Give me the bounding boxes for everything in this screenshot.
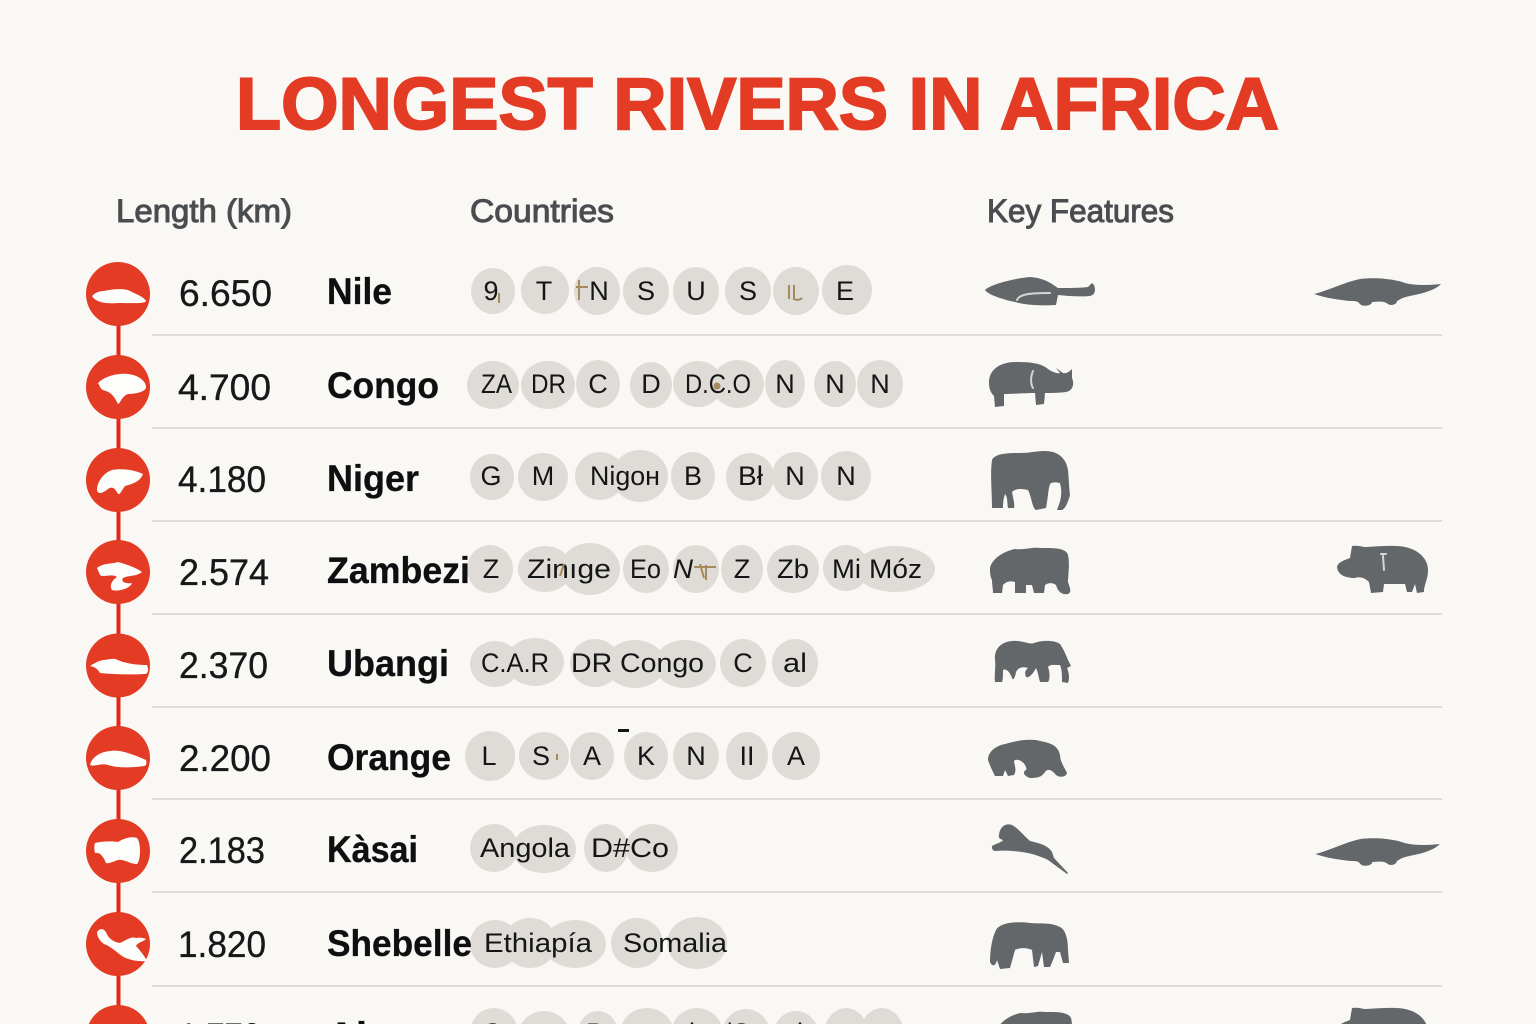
feature icon: hippo right [1337, 546, 1428, 593]
feature icon: elephant small [995, 641, 1071, 683]
country chips: Zinıge [527, 554, 611, 584]
timeline connector [116, 320, 120, 1010]
length: 4.700 [178, 367, 271, 408]
row: Shebelle [86, 912, 1069, 976]
country chips: Bł [738, 461, 763, 491]
feature icon: hippo [990, 548, 1070, 594]
country chips: S [532, 741, 550, 771]
country chips: U [686, 276, 706, 306]
country chips: A [787, 741, 805, 771]
country chips: E [836, 276, 854, 306]
country chips: Eo [630, 554, 661, 584]
country chips: N [870, 369, 890, 399]
length: 4.180 [178, 459, 266, 500]
river badge: Niger [86, 448, 150, 512]
river badge: cropped [86, 1005, 150, 1024]
country chips: S [637, 276, 655, 306]
country chips: C [733, 648, 753, 678]
country chips: D#Co [591, 833, 669, 863]
country chips: C [588, 369, 608, 399]
country chips: N [589, 276, 609, 306]
country chips: G [480, 461, 502, 491]
country chips: C.A.R [481, 648, 549, 678]
length: 2.200 [179, 738, 271, 779]
column heading: length: Length (km) [116, 193, 292, 229]
row: Nile [86, 262, 1441, 326]
country chips: K [637, 741, 655, 771]
country chips: N [836, 461, 856, 491]
feature icon: elephant cropped [996, 1012, 1073, 1024]
row: Niger [86, 448, 1070, 512]
country chips: Nigoн [590, 461, 660, 491]
country chips: ZA [481, 369, 512, 399]
country chips: N [785, 461, 805, 491]
country chips [470, 824, 678, 873]
country chips [471, 265, 872, 315]
column heading: countries: Countries [470, 193, 614, 229]
feature icon: rhinoceros [989, 362, 1073, 407]
length: 6.650 [179, 273, 272, 314]
river name: Shebelle [327, 923, 472, 964]
title: LONGEST RIVERS IN AFRICA [236, 64, 1279, 145]
country chips: Ethiapía [484, 928, 593, 958]
country chips: N [825, 369, 845, 399]
country chips: al [783, 648, 807, 678]
country chips: A [583, 741, 601, 771]
feature icon: hippo cropped [1337, 1008, 1428, 1024]
river badge: Nile [86, 262, 150, 326]
river name: Congo [327, 365, 439, 406]
river badge: Zambezi [86, 540, 150, 604]
country chips [470, 917, 728, 969]
country chips: M [532, 461, 554, 491]
country chips: S [739, 276, 757, 306]
country chips: Z [483, 554, 499, 584]
country chips: B [684, 461, 702, 491]
length: 2.574 [179, 552, 269, 593]
country chips: DR Congo [571, 648, 704, 678]
river name: Nile [327, 271, 392, 312]
country chips: N [673, 554, 694, 584]
feature icon: elephant [991, 451, 1070, 510]
river badge: Orange [86, 726, 150, 790]
length: 1.820 [178, 924, 266, 965]
feature icon: bear-like animal [988, 740, 1067, 778]
river name: Niger [327, 458, 419, 499]
length: 2.183 [179, 830, 265, 871]
row: Kasai [86, 819, 1440, 883]
country chips: Mi [832, 554, 861, 584]
country chips [470, 450, 871, 502]
country chips [465, 729, 820, 781]
country chips: N [686, 741, 706, 771]
country chips: 9 [483, 276, 499, 306]
country chips: N [775, 369, 795, 399]
country chips: D [641, 369, 661, 399]
country chips: Zb [777, 554, 809, 584]
river badge: Congo [86, 355, 150, 419]
feature icon: lizard [992, 824, 1068, 874]
country chips: D.C.O [685, 369, 751, 399]
country chips [467, 360, 903, 409]
row: Ubangi [86, 634, 1071, 698]
country chips: Z [734, 554, 750, 584]
country chips: L [481, 741, 497, 771]
country chips: T [536, 276, 552, 306]
feature icon: crocodile [1314, 278, 1441, 306]
row: partly cropped ninth river [86, 1005, 1428, 1024]
country chips: II [739, 741, 755, 771]
country chips: Somalia [623, 928, 728, 958]
river name: Ubangi [327, 643, 449, 684]
country chips [470, 1008, 904, 1024]
country chips [470, 638, 818, 688]
river badge: Ubangi [86, 634, 150, 698]
river badge: Kasai [86, 819, 150, 883]
row: Zambezi [86, 540, 1428, 604]
column heading: key features: Key Features [987, 193, 1174, 229]
length: 2.370 [179, 645, 268, 686]
river name: Orange [327, 737, 451, 778]
river name: Kàsai [327, 829, 418, 870]
row: Orange [86, 726, 1067, 790]
river badge: Shebelle [86, 912, 150, 976]
feature icon: crocodile right [1315, 838, 1440, 866]
row: Congo [86, 355, 1073, 419]
country chips: Angola [480, 833, 571, 863]
country chips [467, 543, 935, 595]
country chips: Móz [869, 554, 922, 584]
country chips: DR [531, 369, 566, 399]
feature icon: fish [985, 277, 1095, 305]
feature icon: elephant with tail [990, 922, 1069, 969]
river name: Zambezi [327, 550, 470, 591]
